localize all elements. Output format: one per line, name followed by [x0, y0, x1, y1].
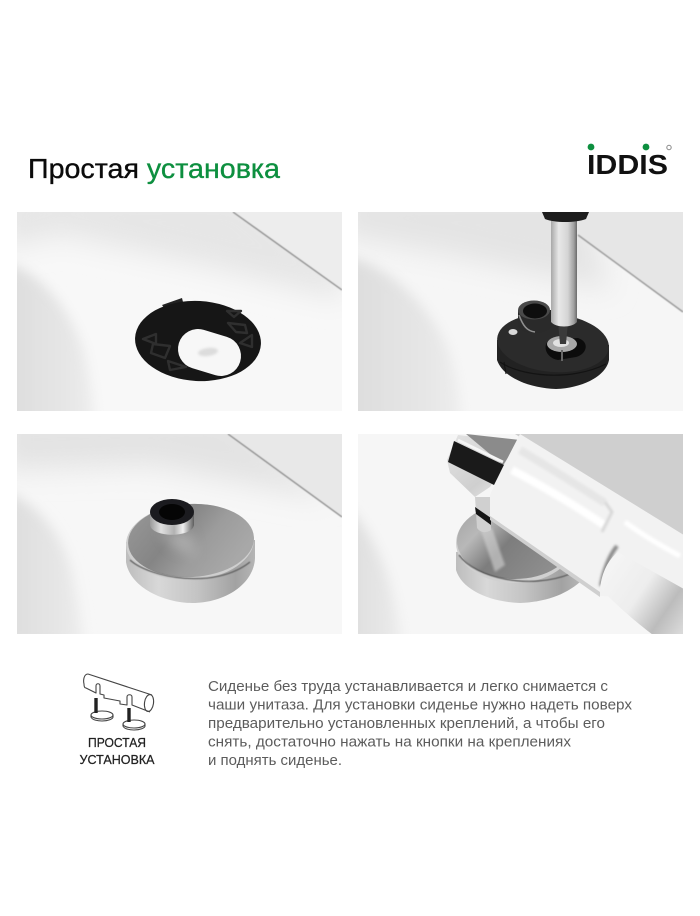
icon caption: ПРОСТАЯ	[88, 735, 146, 750]
panel: photo of seat hinge snapped on	[358, 434, 683, 634]
panel: photo of steel cover on base	[17, 434, 342, 634]
description text: снять, достаточно нажать на кнопки на креплениях	[208, 734, 572, 750]
seat roller	[600, 554, 683, 634]
title: Простая установка	[28, 153, 281, 184]
logo: IDDIS: IDDIS	[587, 149, 668, 180]
adapter plate	[133, 298, 263, 384]
description text: Сиденье без труда устанавливается и легко снимается с	[208, 679, 608, 695]
screwdriver	[542, 212, 589, 344]
description text: и поднять сиденье.	[208, 753, 342, 769]
description text: предварительно установленных креплений, а чтобы его	[208, 716, 605, 732]
chrome hinge cylinder	[447, 434, 520, 497]
white seat body	[490, 434, 700, 600]
description text: чаши унитаза. Для установки сиденье нужно надеть поверх	[208, 698, 633, 714]
icon: simple installation	[84, 674, 155, 730]
icon caption: УСТАНОВКА	[80, 752, 155, 767]
chrome hinge neck	[475, 497, 491, 532]
icon caption	[80, 735, 155, 767]
steel cover	[124, 499, 256, 603]
black base with boss	[495, 300, 611, 389]
panel: photo of adapter plate on bowl	[17, 212, 342, 411]
steel cover	[456, 513, 580, 603]
screw	[547, 336, 577, 361]
panel: photo of screwdriver fixing the base	[358, 212, 683, 411]
description text	[208, 679, 633, 769]
